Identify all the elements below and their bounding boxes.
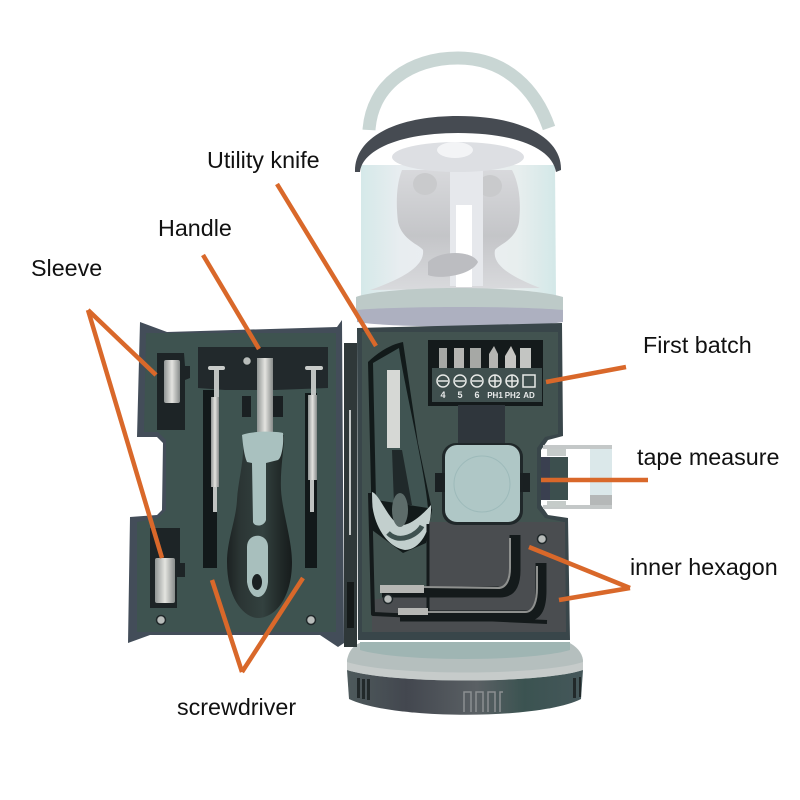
bit size labels: PH2 (505, 391, 521, 400)
icon: upper sleeve (157, 353, 190, 430)
icon: bit holder (428, 340, 543, 445)
icon: grey collar (356, 288, 563, 322)
icon: tape measure (435, 443, 530, 525)
panel: left door (128, 320, 357, 647)
lantern top (355, 58, 563, 326)
arrow: tape measure (541, 478, 648, 482)
arrow: first batch (546, 367, 626, 382)
icon: hinge (344, 343, 357, 647)
icon: glass globe (361, 165, 556, 296)
icon: tray screws (384, 534, 546, 604)
bit size labels: PH1 (487, 391, 503, 400)
icon: dark top ring (355, 116, 561, 172)
icon: screws (156, 356, 316, 624)
icon: lower tray shadow (372, 522, 566, 632)
arrow: utility knife (277, 184, 376, 346)
label: screwdriver: screwdriver (177, 694, 296, 720)
lantern base (347, 642, 583, 715)
arrow: inner hexagon lower (559, 588, 630, 600)
label: tape measure: tape measure (637, 444, 779, 470)
bit size labels: 5 (457, 390, 463, 400)
icon: carrying handle (369, 58, 549, 130)
arrow: sleeve lower (88, 310, 162, 558)
bit size labels: 6 (474, 390, 480, 400)
bit size labels: AD (523, 391, 535, 400)
arrow: screwdriver left (212, 580, 242, 672)
bit size labels (440, 390, 535, 400)
arrow: handle (203, 255, 259, 349)
icon: main screwdriver (227, 358, 292, 618)
label: first batch: First batch (643, 332, 752, 358)
arrow: sleeve upper (88, 310, 156, 375)
icon: reflector bulbs (370, 142, 540, 290)
icon: utility knife (368, 342, 432, 553)
panel: right tray (357, 323, 612, 640)
callout arrows (88, 184, 648, 672)
icon: lower sleeve (150, 528, 185, 608)
icon: hex keys (370, 493, 547, 622)
label: handle: Handle (158, 215, 232, 241)
icon: tape measure clip (541, 445, 612, 509)
icon: small screwdriver right (305, 366, 323, 568)
icon: small screwdriver left (203, 366, 225, 568)
icon: bit symbols (437, 375, 535, 387)
label: utility knife: Utility knife (207, 147, 320, 173)
icon: handle tray cutout (198, 347, 328, 390)
label: sleeve: Sleeve (31, 255, 102, 281)
label: inner hexagon: inner hexagon (630, 554, 778, 580)
arrow: inner hexagon upper (529, 547, 630, 588)
bit size labels: 4 (440, 390, 446, 400)
icon: base ring (347, 670, 583, 715)
arrow: screwdriver right (242, 578, 303, 672)
